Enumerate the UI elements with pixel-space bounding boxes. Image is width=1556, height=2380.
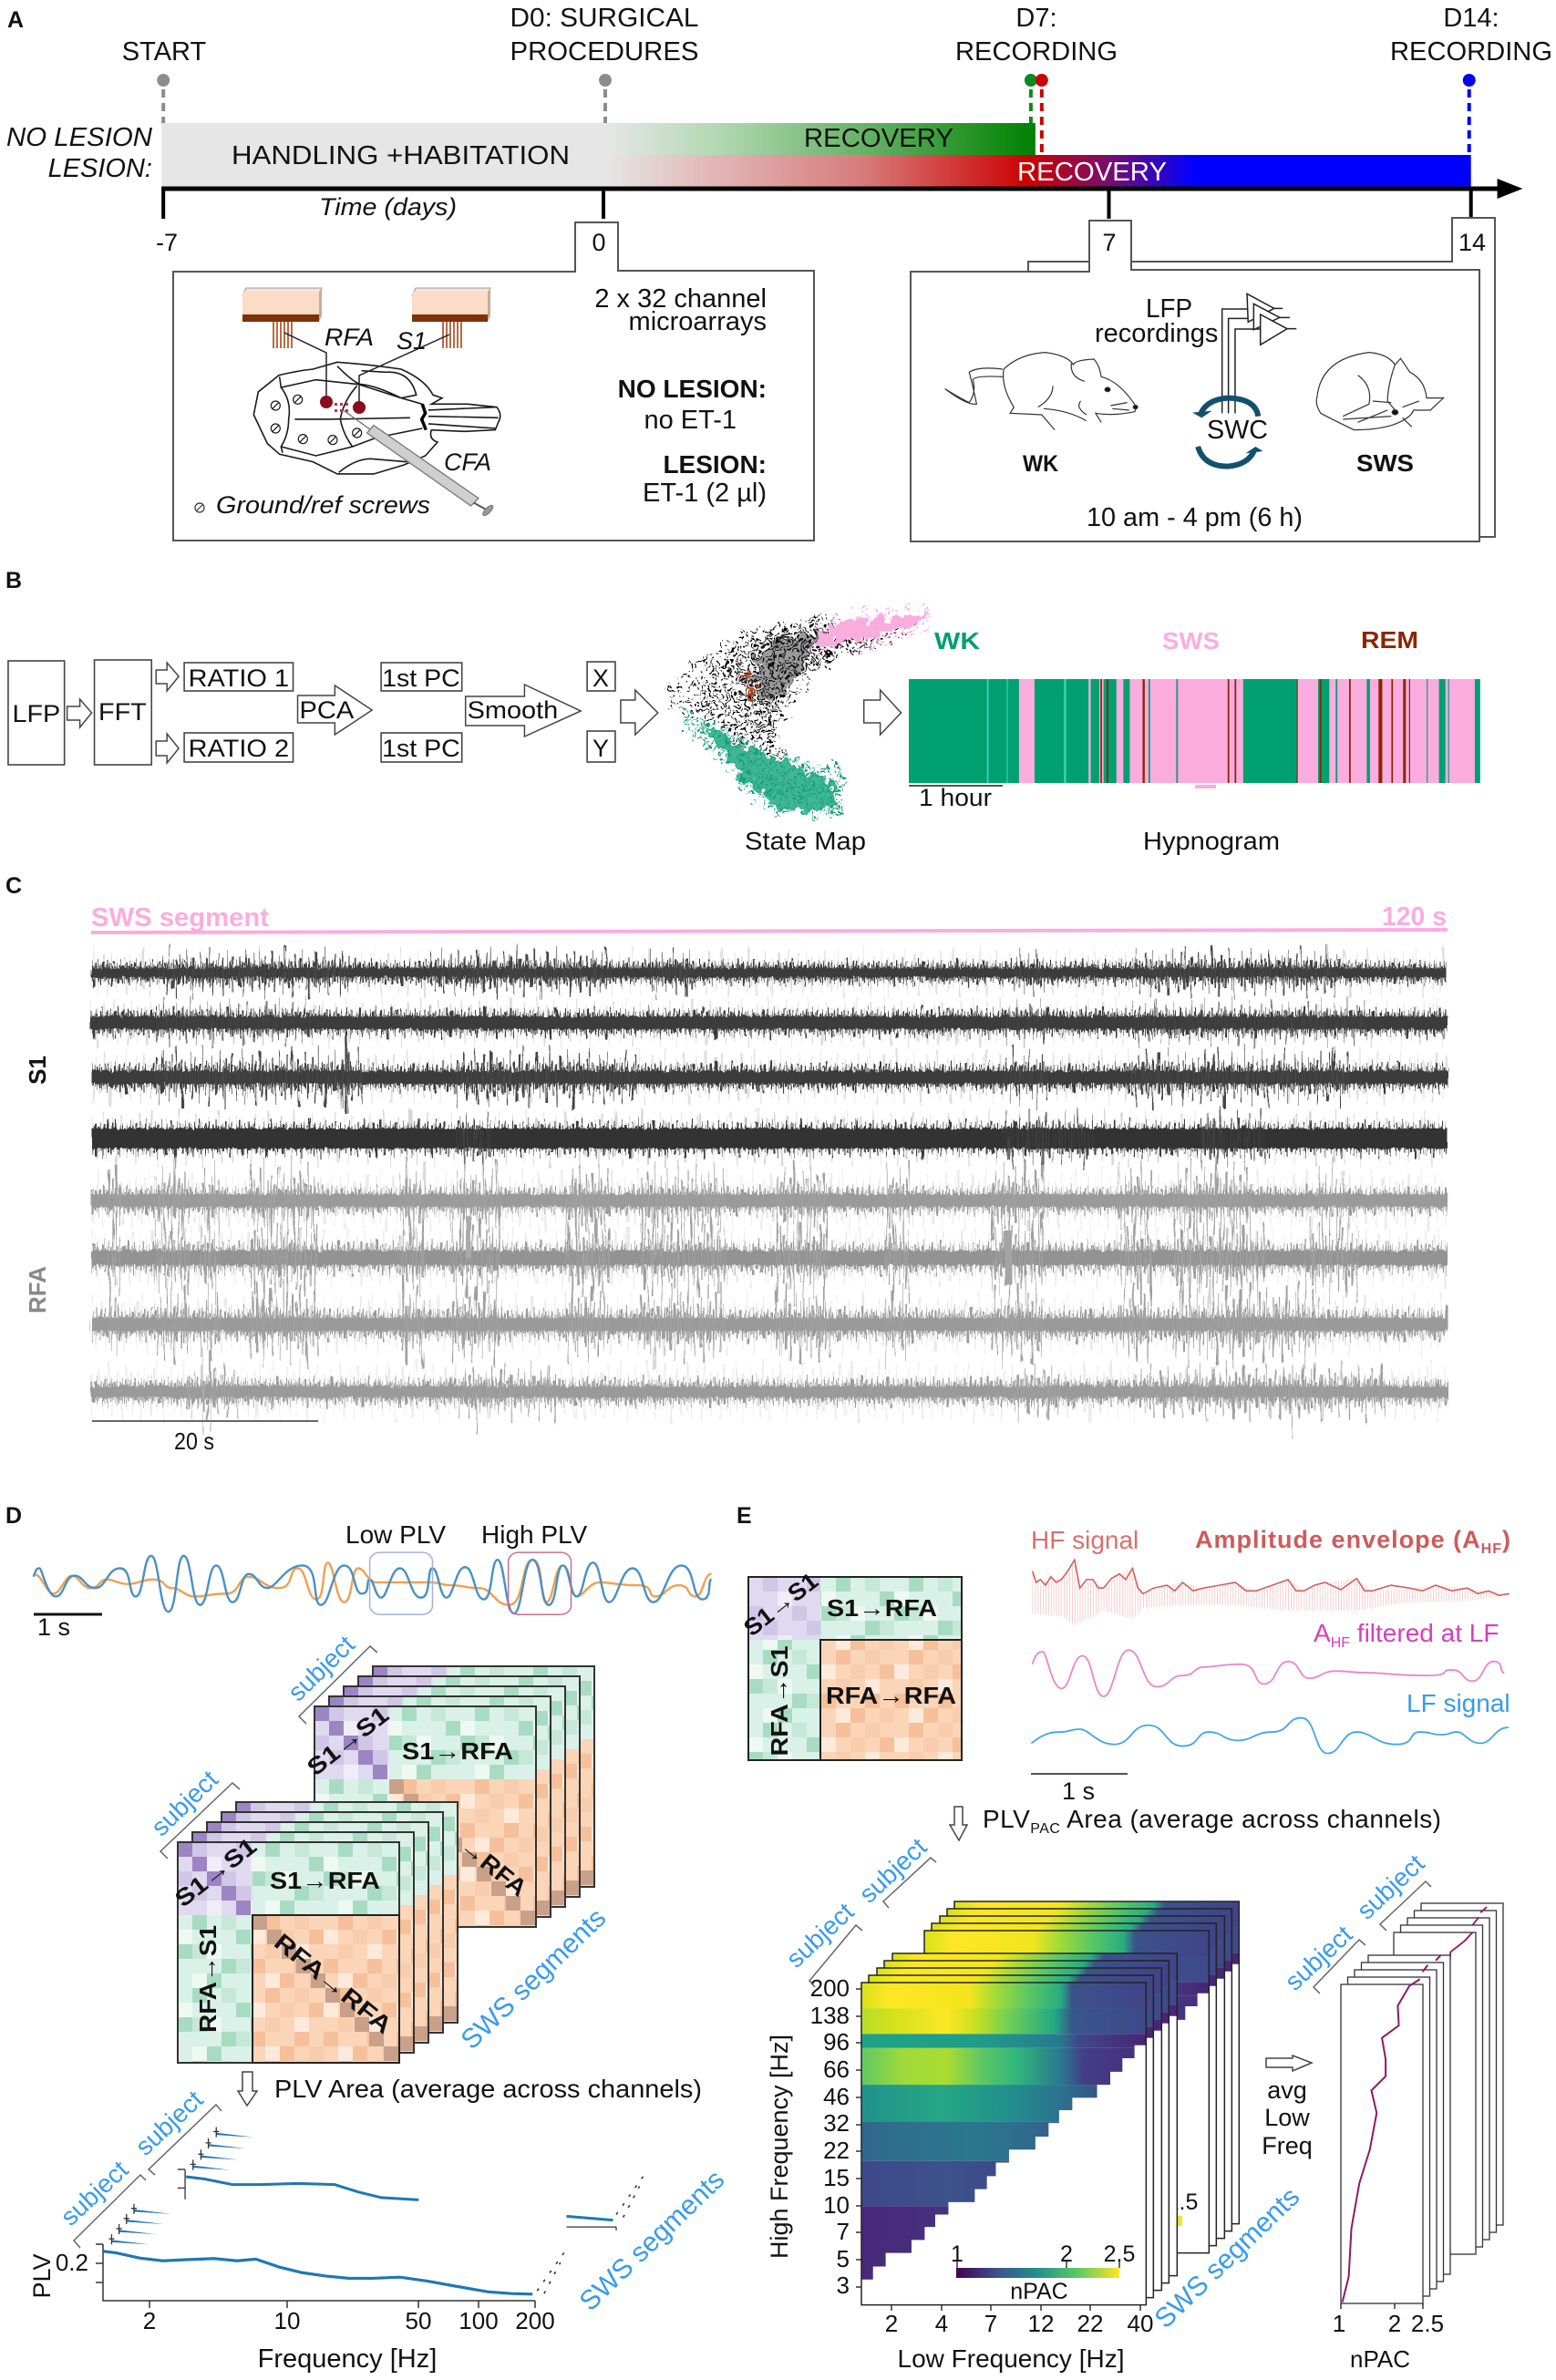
heatmap axes: 5 (837, 2245, 850, 2272)
surgery text block: LESION: (663, 450, 767, 479)
PLV window labels (345, 1520, 588, 1549)
callout: surgery box (173, 222, 814, 541)
captions: State Map (745, 827, 866, 855)
panel letter B: B (5, 568, 22, 593)
panel B: sleep scoring pipeline (5, 568, 1480, 855)
captions: Hypnogram (1143, 827, 1280, 855)
axes (96, 2244, 535, 2308)
panel E: phase amplitude coupling analysis (737, 1503, 1510, 2373)
heatmap axes: 22 (823, 2137, 850, 2164)
bar labels: LESION: (48, 154, 152, 183)
trace RFA-2 (91, 1190, 1448, 1326)
axis labels: 0.2 (56, 2249, 88, 2276)
axis labels (28, 2249, 555, 2374)
PLV curve (103, 2251, 532, 2294)
flow labels: Smooth (468, 696, 558, 724)
electrode leader lines (284, 333, 449, 407)
heatmap axes: 32 (823, 2109, 850, 2137)
nPAC axis labels: nPAC (1350, 2345, 1410, 2373)
signal labels: ) (1502, 1526, 1510, 1553)
nPAC axis labels (1333, 2303, 1444, 2373)
recording labels: WK (1023, 451, 1058, 477)
captions (745, 827, 1280, 855)
implant sites (320, 396, 366, 414)
milestone labels: D0: SURGICAL (510, 4, 698, 33)
subject and segment labels on chart: subject (130, 2085, 209, 2161)
signal labels: HF (1481, 1541, 1501, 1557)
rear subject PLV matrix stack (302, 1666, 594, 1927)
PLV area caption: PLV Area (average across channels) (274, 2075, 702, 2103)
SWS segment bar (91, 902, 1448, 932)
heatmap axes: 7 (984, 2310, 997, 2337)
heatmap axes: 96 (823, 2028, 850, 2055)
small PLV matrix: S1→RFA (827, 1594, 937, 1622)
timeline bars (161, 89, 1471, 187)
hypnogram scale bar: 1 hour (919, 784, 992, 811)
subject labels on line plots (1280, 1849, 1431, 1996)
PLV PAC caption: Area (average across channels) (1060, 1805, 1441, 1833)
surgery text block (594, 284, 767, 508)
surgery text block: microarrays (629, 307, 767, 336)
rear subject PLV matrix stack: S1→RFA (402, 1737, 513, 1765)
trace S1-2 (91, 981, 1448, 1065)
heatmap axes: 7 (837, 2218, 850, 2245)
day 0 label: 0 (592, 229, 606, 256)
callout: recording boxes (911, 218, 1495, 541)
hypnogram (909, 679, 1480, 783)
bar labels (6, 123, 1167, 187)
PLV PAC caption: PAC (1030, 1821, 1060, 1837)
synchrony scale bar (34, 1613, 102, 1641)
subject and segment labels on chart (56, 2085, 730, 2317)
RFA traces (91, 1139, 1448, 1437)
milestone labels: RECORDING (955, 37, 1118, 67)
panel A: experimental timeline (6, 4, 1552, 541)
colour bar legend: 2.5 (1104, 2241, 1135, 2267)
trace S1-1 (91, 933, 1448, 1012)
signal scale bar: 1 s (1062, 1777, 1095, 1805)
subject and segment labels on chart: SWS segments (574, 2164, 730, 2317)
bar labels: RECOVERY (1017, 158, 1167, 187)
synchrony scale bar: 1 s (37, 1613, 70, 1641)
day -7 label: -7 (156, 229, 178, 256)
front subject heatmap stack (861, 1953, 1177, 2305)
heatmap axes: 15 (823, 2164, 850, 2191)
trace S1-3 (91, 1032, 1448, 1123)
recording labels: 10 am - 4 pm (6 h) (1087, 503, 1303, 532)
signal labels: HF signal (1031, 1526, 1139, 1554)
panel D: phase locking value analysis (5, 1503, 730, 2374)
signal labels: HF (1331, 1635, 1350, 1651)
average low frequency label (1262, 2076, 1313, 2159)
SWS segment bar: SWS segment (91, 903, 269, 932)
bar labels: RECOVERY (804, 124, 953, 153)
front nPAC line plot stack (1341, 1955, 1450, 2303)
small PLV matrix: S1→S1 (738, 1567, 823, 1642)
heatmap axes: 46 (823, 2083, 850, 2110)
signal labels: filtered at LF (1350, 1619, 1499, 1647)
heatmap axes: 4 (935, 2310, 948, 2337)
milestone labels: RECORDING (1390, 37, 1552, 67)
day 14 label: 14 (1458, 229, 1486, 256)
average low frequency label: Freq (1262, 2132, 1313, 2159)
axis labels: 2 (143, 2307, 156, 2334)
bar labels: NO LESION (6, 123, 152, 152)
subject and segment labels on heatmaps: subject (854, 1832, 933, 1909)
syringe (344, 410, 495, 517)
recording labels: SWC (1207, 416, 1268, 445)
colour bar legend: nPAC (1010, 2279, 1068, 2304)
flow arrows (67, 663, 902, 763)
region labels: RFA (24, 1266, 51, 1314)
recording labels (1023, 294, 1414, 532)
heatmap axes: 40 (1128, 2310, 1153, 2337)
anatomical labels: CFA (444, 448, 491, 476)
time scale bar: 20 s (174, 1427, 214, 1455)
milestone labels: D14: (1443, 4, 1499, 33)
heatmap axes: High Frequency [Hz] (766, 2035, 793, 2259)
anatomical labels: RFA (325, 324, 374, 351)
surgery text block: no ET-1 (644, 406, 737, 435)
small PLV matrix (738, 1567, 962, 1760)
signal labels: Amplitude envelope (A (1195, 1526, 1480, 1553)
state labels (934, 626, 1418, 654)
heatmap axes: 66 (823, 2055, 850, 2083)
icon: sleeping rat (1316, 353, 1443, 430)
rear subject PLV matrix stack: →RFA (455, 1832, 532, 1902)
heatmap axes: Low Frequency [Hz] (897, 2344, 1125, 2373)
flow labels: RATIO 2 (189, 735, 289, 762)
nPAC axis labels: 2.5 (1411, 2310, 1444, 2337)
axis labels: 200 (515, 2307, 555, 2334)
subject and segment labels on matrices: subject (283, 1630, 360, 1706)
flow labels: Y (593, 735, 609, 762)
axis labels: 100 (459, 2307, 499, 2334)
anatomical labels: Ground/ref screws (216, 491, 430, 519)
anatomical labels: S1 (397, 327, 427, 355)
flow labels: PCA (300, 696, 354, 724)
surgery text block: NO LESION: (618, 375, 767, 403)
subject and segment labels on matrices (146, 1630, 612, 2055)
trace RFA-3 (91, 1261, 1448, 1388)
heatmap axes: 200 (810, 1974, 850, 2002)
state labels: REM (1361, 626, 1418, 654)
subject and segment labels on heatmaps: subject (781, 1897, 860, 1973)
state map scatter (667, 602, 939, 818)
anatomical labels (216, 324, 491, 519)
milestone labels: D7: (1015, 4, 1057, 33)
region labels (24, 1056, 51, 1314)
flow labels: FFT (98, 698, 147, 726)
heatmap axes: 12 (1028, 2310, 1054, 2337)
subject and segment labels on heatmaps: SWS segments (1149, 2181, 1305, 2334)
axis labels: PLV (28, 2253, 56, 2299)
axis labels: 50 (406, 2307, 431, 2334)
colour bar legend: 2 (1060, 2241, 1073, 2267)
rear subject heatmap stack: 2.5 (1167, 2189, 1198, 2215)
rear nPAC line plot stack (1394, 1903, 1503, 2254)
recording labels: LFP (1146, 294, 1192, 324)
SWS segment bar: 120 s (1382, 902, 1447, 932)
flow labels: LFP (12, 700, 60, 727)
rat skull with implant sites (253, 362, 500, 474)
surgery text block: ET-1 (2 µl) (643, 479, 767, 508)
icon: sleep-wake cycle arrows (1192, 398, 1263, 467)
bar labels: HANDLING +HABITATION (232, 141, 570, 170)
heatmap axes: 138 (810, 2002, 850, 2029)
average low frequency label: avg (1267, 2076, 1307, 2104)
signal labels: LF signal (1407, 1689, 1510, 1717)
panel C: LFP traces during SWS segment (5, 873, 1448, 1455)
subject and segment labels on matrices: subject (146, 1765, 223, 1841)
time axis arrow (161, 179, 1522, 219)
front subject PLV matrix stack: S1→RFA (270, 1867, 380, 1894)
surgery text block: 2 x 32 channel (594, 284, 767, 314)
nPAC axis labels: 1 (1333, 2310, 1345, 2337)
phase synchrony traces (34, 1552, 712, 1614)
arrow: average across low frequency (1266, 2055, 1312, 2071)
milestone pins (157, 74, 1476, 129)
subject labels on line plots: subject (1352, 1849, 1430, 1925)
subject and segment labels on heatmaps (781, 1832, 1305, 2334)
arrow: to PLV area (238, 2072, 257, 2106)
processing flow boxes (8, 660, 615, 765)
heatmap axes: 22 (1077, 2310, 1103, 2337)
PLV spectrum chart (28, 2085, 730, 2374)
flow labels: RATIO 1 (189, 665, 289, 692)
PLV window labels: High PLV (481, 1520, 588, 1549)
milestone labels: PROCEDURES (510, 37, 698, 67)
electrode arrays (242, 288, 490, 348)
panel letter E: E (737, 1503, 752, 1529)
milestone labels: START (122, 37, 206, 67)
subject and segment labels on chart: subject (56, 2155, 134, 2231)
recording labels: recordings (1095, 319, 1218, 348)
small PLV matrix: RFA→S1 (766, 1646, 793, 1756)
PLV PAC caption: PLV (983, 1805, 1030, 1833)
LFP amplifiers (1222, 294, 1296, 413)
colour bar legend: 1 (951, 2241, 963, 2267)
small PLV matrix: RFA→RFA (826, 1682, 956, 1709)
trace RFA-4 (91, 1346, 1448, 1437)
arrow: to PLV PAC area (950, 1807, 967, 1840)
signal traces (1031, 1560, 1510, 1754)
signal labels: A (1314, 1619, 1331, 1647)
heatmap axes: 2 (885, 2310, 898, 2337)
flow labels: 1st PC (382, 665, 460, 692)
panel letter C: C (5, 873, 22, 899)
region labels: S1 (24, 1056, 51, 1085)
subject labels on line plots: subject (1280, 1920, 1358, 1996)
panel letter A: A (7, 7, 24, 33)
recording labels: SWS (1356, 449, 1414, 477)
S1 traces (91, 933, 1448, 1190)
panel letter D: D (5, 1503, 22, 1529)
state labels: WK (934, 627, 980, 654)
heatmap axes: 10 (823, 2191, 850, 2219)
axis caption: Time (days) (319, 193, 457, 221)
heatmap axes (766, 1974, 1153, 2373)
rear subject heatmap stack (924, 1901, 1239, 2253)
screw legend icon (195, 503, 204, 512)
signal scale bar (1031, 1774, 1128, 1805)
front subject PLV matrix stack: RFA→S1 (194, 1925, 222, 2033)
average low frequency label: Low (1264, 2104, 1310, 2131)
front subject PLV matrix stack: RFA→RFA (269, 1928, 397, 2039)
trace RFA-1 (91, 1139, 1448, 1262)
subject and segment labels on matrices: SWS segments (456, 1902, 612, 2055)
heatmap axes: 3 (837, 2272, 850, 2299)
flow labels (12, 665, 609, 762)
icon: awake rat (945, 353, 1138, 430)
nPAC axis labels: 2 (1388, 2310, 1401, 2337)
signal labels (1031, 1526, 1510, 1717)
axis labels: Frequency [Hz] (258, 2344, 437, 2374)
rear subject PLV matrix stack: S1→S1 (302, 1701, 394, 1781)
front subject PLV matrix stack: S1→S1 (170, 1832, 262, 1912)
milestone labels (122, 4, 1552, 67)
colour bar legend (951, 2241, 1135, 2304)
state labels: SWS (1162, 627, 1220, 654)
trace S1-4 (91, 1087, 1448, 1190)
flow labels: 1st PC (382, 735, 460, 762)
PLV window labels: Low PLV (345, 1520, 446, 1549)
axis labels: 10 (274, 2307, 300, 2334)
front subject PLV matrix stack (170, 1802, 458, 2063)
flow labels: X (593, 665, 609, 692)
day 7 label: 7 (1102, 229, 1117, 256)
stacked curve hints (108, 2128, 644, 2293)
